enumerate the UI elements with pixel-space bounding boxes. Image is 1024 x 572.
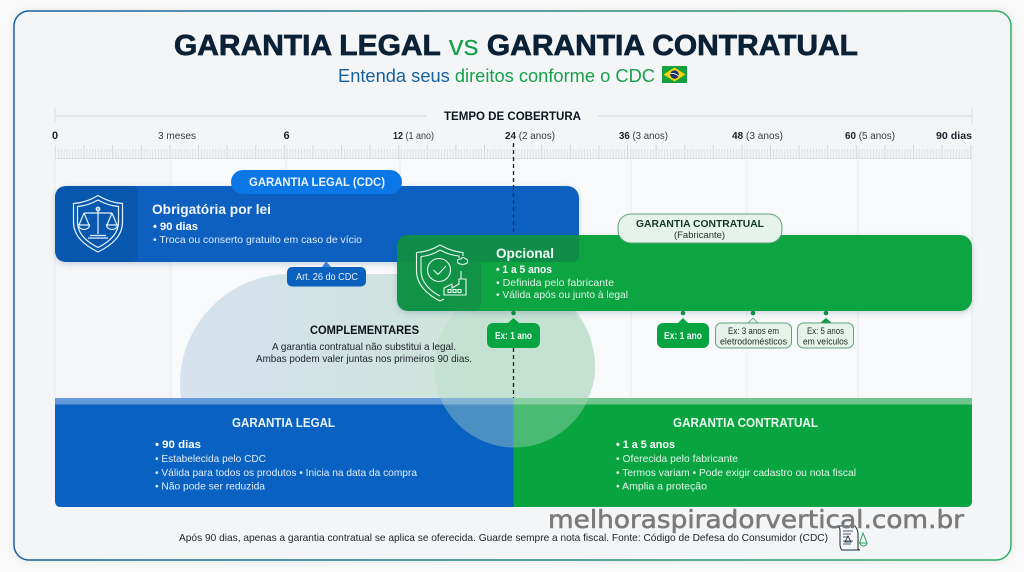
example tag: 5 anos veículos bbox=[798, 311, 854, 348]
list: garantia contratual bbox=[616, 439, 856, 492]
tag: art. 26 do cdc bbox=[287, 261, 366, 286]
axis heading: TEMPO DE COBERTURA bbox=[444, 111, 581, 123]
list: garantia contratual: • Amplia a proteção bbox=[616, 480, 707, 492]
list: bar legal bbox=[153, 221, 362, 246]
title: GARANTIA LEGAL vs GARANTIA CONTRATUAL bbox=[174, 30, 858, 62]
axis labels: 36 (3 anos) bbox=[619, 130, 668, 142]
axis labels: 48 (3 anos) bbox=[732, 130, 783, 142]
footer note: Após 90 dias, apenas a garantia contratual se aplica se oferecida. Guarde sempre a nota fiscal. Fonte: Código de Defesa do Consumidor (CDC) bbox=[179, 532, 828, 544]
example tag: 3 anos eletrodomésticos: eletrodomésticos bbox=[720, 336, 787, 348]
list: garantia contratual: • Oferecida pelo fabricante bbox=[616, 453, 738, 465]
axis labels: 12 (1 ano) bbox=[393, 130, 434, 142]
overlap circle bbox=[434, 286, 595, 448]
chart area grid bbox=[55, 145, 972, 399]
example tag: 3 anos eletrodomésticos bbox=[716, 311, 792, 348]
tag: art. 26 do cdc: Art. 26 do CDC bbox=[296, 272, 358, 283]
example tag: 1 ano at 24 bbox=[487, 311, 540, 348]
bar: garantia contratual bbox=[397, 235, 972, 311]
axis labels: 90 dias bbox=[936, 130, 972, 142]
complementares note: A garantia contratual não substitui a legal. bbox=[272, 341, 456, 353]
axis labels: 24 (2 anos) bbox=[505, 130, 555, 142]
list: garantia legal bbox=[155, 439, 417, 492]
icon: shield with scales bbox=[74, 196, 122, 252]
list: bar contratual: • Definida pelo fabricante bbox=[496, 277, 614, 289]
example tag: 5 anos veículos: Ex: 5 anos bbox=[807, 326, 844, 337]
axis labels: 3 meses bbox=[158, 130, 196, 142]
complementares note bbox=[256, 325, 472, 365]
pill: garantia contratual fabricante: GARANTIA CONTRATUAL bbox=[636, 218, 765, 230]
list: garantia legal: • Estabelecida pelo CDC bbox=[155, 453, 266, 465]
list: bar contratual: • Válida após ou junto à legal bbox=[496, 289, 628, 301]
axis labels bbox=[52, 130, 972, 142]
list: bar legal: • Troca ou conserto gratuito em caso de vício bbox=[153, 234, 362, 246]
icon: document with scales bbox=[837, 526, 867, 550]
list: garantia contratual: • 1 a 5 anos bbox=[616, 439, 675, 451]
icon: shield with factory bbox=[416, 245, 468, 301]
example tag: 5 anos veículos: em veículos bbox=[803, 336, 848, 348]
list: bar contratual bbox=[496, 264, 628, 301]
panel: garantia contratual summary bbox=[514, 398, 972, 507]
heading: opcional: Opcional bbox=[496, 245, 554, 261]
heading: obrigatória por lei: Obrigatória por lei bbox=[152, 201, 271, 217]
list: garantia contratual: • Termos variam • Pode exigir cadastro ou nota fiscal bbox=[616, 467, 856, 479]
list: bar legal: • 90 dias bbox=[153, 221, 198, 233]
complementares note: COMPLEMENTARES bbox=[310, 325, 419, 337]
axis labels: 60 (5 anos) bbox=[845, 130, 895, 142]
complementares note: Ambas podem valer juntas nos primeiros 90 dias. bbox=[256, 353, 472, 365]
subtitle: Entenda seus direitos conforme o CDC bbox=[338, 66, 655, 86]
pill: garantia legal cdc: GARANTIA LEGAL (CDC) bbox=[249, 177, 385, 189]
example tag: 1 ano bbox=[657, 311, 709, 348]
panel: garantia legal summary bbox=[55, 398, 514, 507]
dashed 24 month marker bbox=[512, 143, 514, 398]
list: garantia legal: • Válida para todos os produtos • Inicia na data da compra bbox=[155, 467, 417, 479]
heading: garantia contratual: GARANTIA CONTRATUAL bbox=[673, 416, 818, 430]
axis labels: 0 bbox=[52, 130, 58, 142]
example tag: 1 ano: Ex: 1 ano bbox=[664, 330, 702, 342]
list: garantia legal: • Não pode ser reduzida bbox=[155, 480, 265, 492]
list: bar contratual: • 1 a 5 anos bbox=[496, 264, 552, 276]
watermark: melhoraspiradorvertical.com.br bbox=[548, 505, 965, 534]
axis labels: 6 bbox=[283, 130, 290, 142]
example tag: 3 anos eletrodomésticos: Ex: 3 anos em bbox=[728, 326, 779, 337]
heading: garantia legal: GARANTIA LEGAL bbox=[232, 416, 335, 430]
pill: garantia legal cdc bbox=[231, 170, 402, 194]
list: garantia legal: • 90 dias bbox=[155, 439, 201, 451]
pill: garantia contratual fabricante: (Fabricante) bbox=[674, 230, 725, 241]
pill: garantia contratual fabricante bbox=[618, 214, 782, 243]
overlap shape: complementares bbox=[180, 274, 595, 399]
icon: Brazil flag bbox=[662, 66, 687, 83]
example tag: 1 ano at 24: Ex: 1 ano bbox=[495, 330, 532, 342]
ruler ticks bbox=[55, 145, 972, 159]
bar: garantia legal bbox=[55, 186, 579, 262]
